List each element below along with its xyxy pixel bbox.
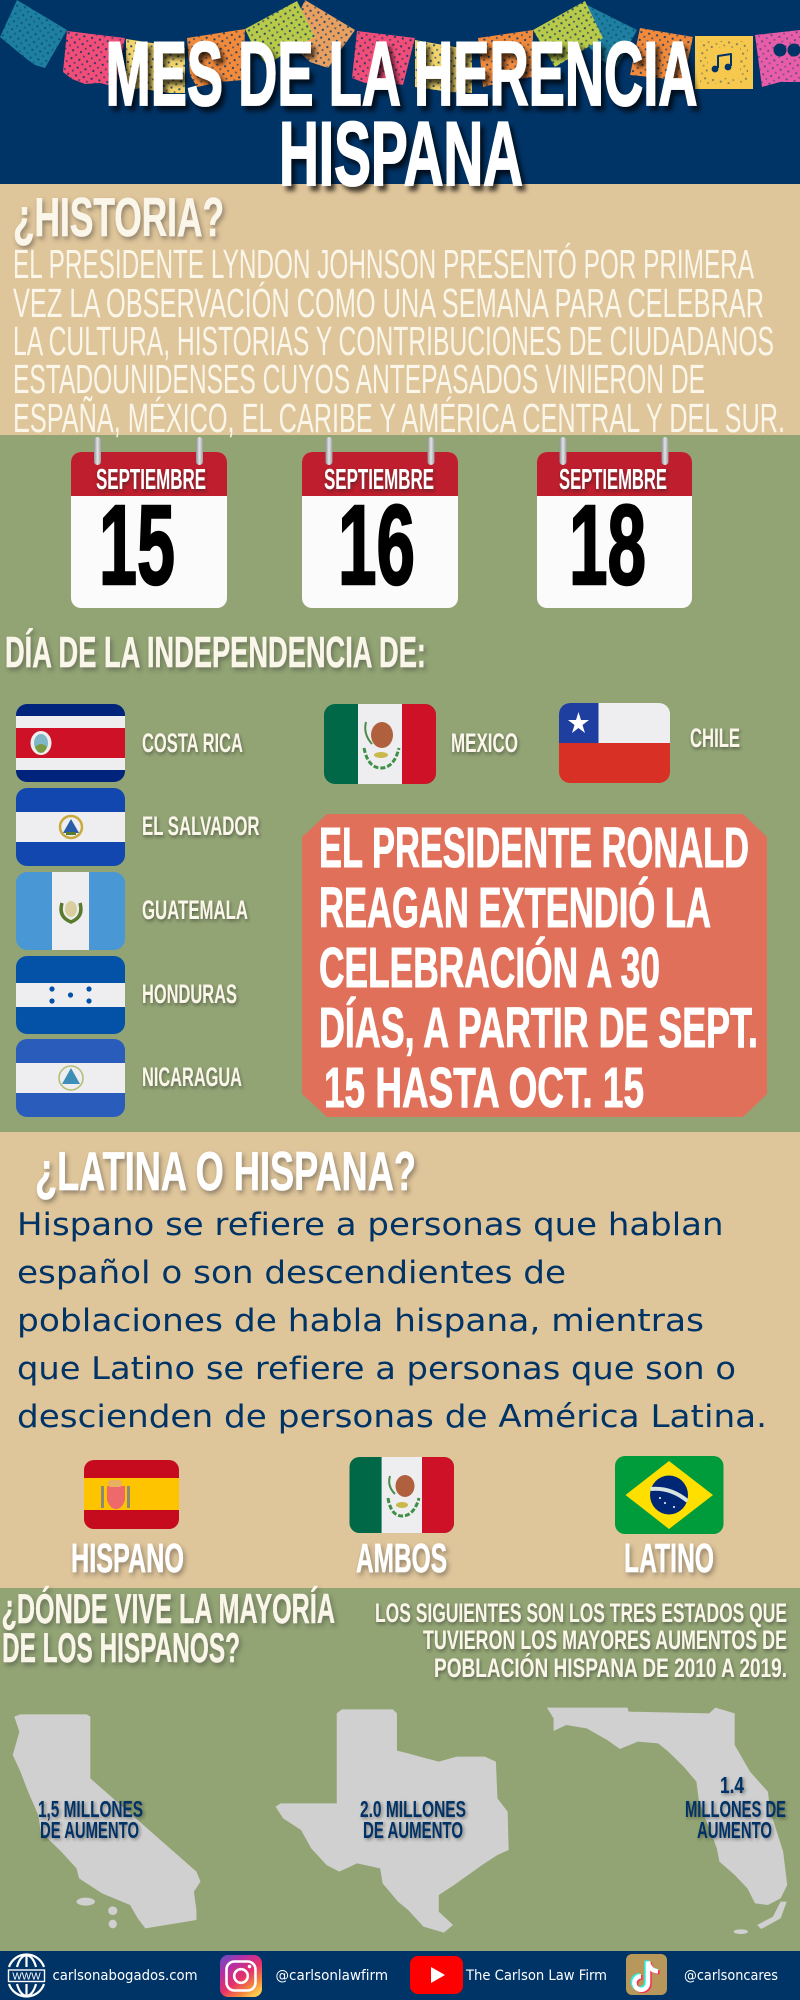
map label: California increase — [38, 1796, 143, 1843]
banner: papel picado — [0, 0, 800, 93]
map: California — [13, 1714, 201, 1928]
label: Costa Rica: COSTA RICA — [142, 728, 243, 758]
map: Texas — [276, 1709, 509, 1933]
label: Chile: CHILE — [690, 723, 740, 753]
calendar: 16: SEPTIEMBRE — [324, 464, 434, 496]
footer: YouTube channel: The Carlson Law Firm — [465, 1968, 607, 1984]
text block: definition — [17, 1207, 767, 1435]
title: HISPANA — [279, 104, 523, 205]
calendar: 18: 18 — [569, 482, 646, 608]
label: Mexico: MEXICO — [451, 728, 518, 758]
footer: website: carlsonabogados.com — [52, 1968, 198, 1984]
calendar: 15: 15 — [99, 482, 175, 608]
icon: TikTok — [626, 1954, 667, 1995]
calendar: 15: SEPTIEMBRE — [96, 464, 206, 496]
heading: where most Hispanics live: ¿DÓNDE VIVE LA MAYORÍA — [2, 1585, 335, 1632]
footer: TikTok handle: @carlsoncares — [684, 1968, 778, 1984]
text block: three states — [375, 1598, 787, 1683]
heading: ¿Latina o Hispana?: ¿LATINA O HISPANA? — [35, 1140, 416, 1202]
calendar: 18 — [537, 437, 692, 608]
map: Florida — [547, 1708, 787, 1934]
flag: Nicaragua — [16, 1039, 125, 1117]
heading: where most Hispanics live: DE LOS HISPANOS? — [2, 1624, 240, 1671]
footer: Instagram handle: @carlsonlawfirm — [276, 1968, 388, 1984]
calendar: 15 — [71, 437, 227, 608]
text block: definition: español o son descendientes de — [17, 1255, 566, 1291]
label: Honduras: HONDURAS — [142, 979, 237, 1009]
flag: Guatemala — [16, 872, 125, 950]
heading: independence day: DÍA DE LA INDEPENDENCIA DE: — [5, 627, 426, 677]
map label: Texas increase — [360, 1796, 466, 1843]
flag: Chile — [559, 703, 670, 783]
icon: website globe: WWW — [12, 1972, 41, 1982]
label: Hispano: HISPANO — [71, 1535, 184, 1581]
calendar: 18: SEPTIEMBRE — [559, 464, 667, 496]
map label: Florida increase: 1.4 — [720, 1772, 744, 1798]
icon: YouTube — [410, 1956, 463, 1994]
heading: ¿Historia?: ¿HISTORIA? — [13, 186, 224, 248]
icon: Instagram — [220, 1955, 262, 1997]
calendar: 16 — [302, 437, 458, 608]
flag: Mexico — [324, 704, 436, 784]
text block: definition: descienden de personas de América Latina. — [17, 1399, 767, 1435]
label: Latino: LATINO — [624, 1535, 714, 1581]
icon: website globe — [8, 1954, 44, 1997]
map label: Texas increase: 2.0 MILLONES — [360, 1796, 466, 1822]
callout: Reagan extension — [302, 814, 767, 1120]
text block: definition: Hispano se refiere a personas que hablan — [17, 1207, 724, 1243]
flag: Mexico (both) — [350, 1457, 454, 1533]
label: Guatemala: GUATEMALA — [142, 895, 248, 925]
heading: where most Hispanics live — [2, 1585, 335, 1671]
flag: Honduras — [16, 956, 125, 1034]
text block: definition: que Latino se refiere a personas que son o — [17, 1351, 736, 1387]
label: Nicaragua: NICARAGUA — [142, 1062, 242, 1092]
flag: Spain — [84, 1460, 179, 1529]
map label: Texas increase: DE AUMENTO — [363, 1817, 463, 1843]
flag: Costa Rica — [16, 704, 125, 782]
label: Ambos: AMBOS — [356, 1535, 447, 1581]
label: El Salvador: EL SALVADOR — [142, 811, 260, 841]
map label: Florida increase — [685, 1772, 786, 1843]
text block: definition: poblaciones de habla hispana, mientras — [17, 1303, 704, 1339]
flag: Brazil — [615, 1456, 724, 1534]
title — [106, 24, 698, 205]
map label: California increase: DE AUMENTO — [40, 1817, 139, 1843]
map label: California increase: 1,5 MILLONES — [38, 1796, 143, 1822]
flag: El Salvador — [16, 788, 125, 866]
text block: history — [13, 241, 785, 441]
calendar: 16: 16 — [338, 482, 415, 608]
